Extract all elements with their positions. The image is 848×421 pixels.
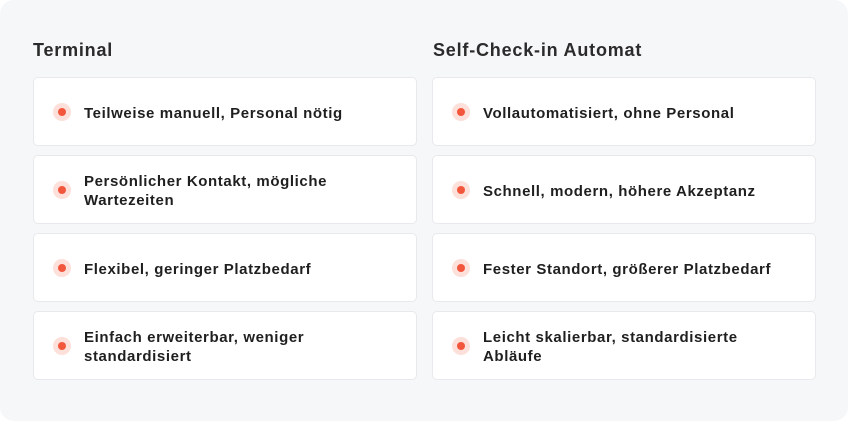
card: right 4: Leicht skalierbar, standardisierte Abläufe	[483, 329, 738, 365]
card: left 4	[33, 311, 417, 380]
heading: Self-Check-in Automat: Self-Check-in Automat	[433, 40, 642, 60]
card: left 4: Einfach erweiterbar, weniger standardisiert	[84, 329, 304, 365]
heading: Terminal: Terminal	[33, 40, 113, 60]
card: left 3	[33, 233, 417, 302]
card: left 2: Persönlicher Kontakt, mögliche Wartezeiten	[84, 173, 327, 209]
card: right 4	[432, 311, 816, 380]
card: right 1	[432, 77, 816, 146]
card: left 1: Teilweise manuell, Personal nötig	[84, 104, 343, 122]
card: right 2	[432, 155, 816, 224]
card: right 3	[432, 233, 816, 302]
card: right 1: Vollautomatisiert, ohne Personal	[483, 104, 734, 122]
card: left 1	[33, 77, 417, 146]
card: left 2	[33, 155, 417, 224]
card: right 3: Fester Standort, größerer Platzbedarf	[483, 260, 771, 278]
card: right 2: Schnell, modern, höhere Akzeptanz	[483, 182, 756, 200]
card: left 3: Flexibel, geringer Platzbedarf	[84, 260, 311, 278]
